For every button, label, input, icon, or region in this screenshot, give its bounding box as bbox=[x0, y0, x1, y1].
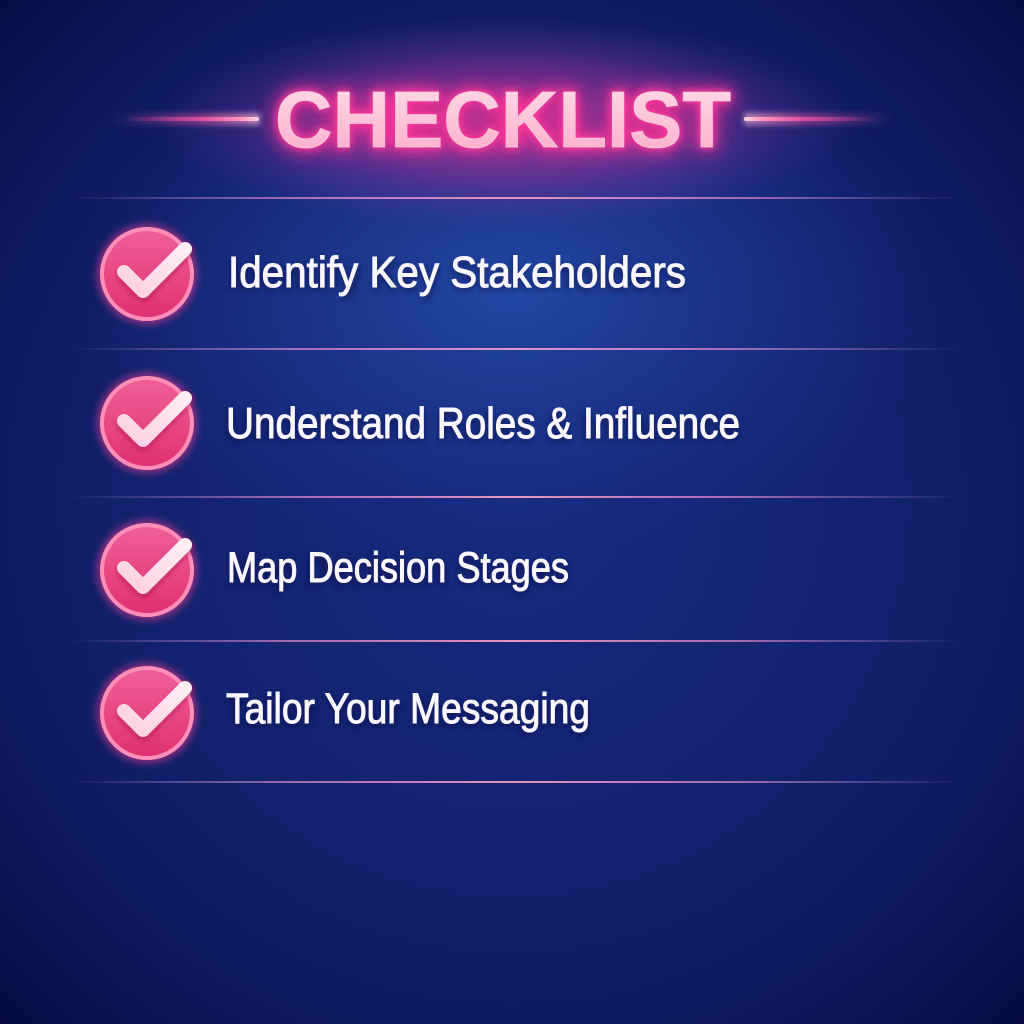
left title flare bbox=[110, 113, 260, 125]
divider 3 bbox=[70, 496, 960, 498]
divider 2 bbox=[70, 348, 960, 350]
label: item 4: Tailor Your Messaging bbox=[226, 685, 590, 733]
title: CHECKLIST bbox=[275, 75, 731, 164]
right title flare bbox=[744, 113, 894, 125]
divider 4 bbox=[70, 640, 960, 642]
divider 5 bbox=[70, 781, 960, 783]
label: item 2: Understand Roles & Influence bbox=[226, 399, 740, 448]
label: item 3: Map Decision Stages bbox=[227, 547, 569, 595]
label: item 1: Identify Key Stakeholders bbox=[228, 251, 686, 300]
divider 1 bbox=[70, 197, 960, 199]
label: item 2: Understand Roles & Influence bbox=[226, 402, 740, 451]
icon: check 1 bbox=[97, 224, 197, 324]
background highlight bbox=[0, 0, 1024, 620]
checklist item 2 bbox=[97, 373, 740, 473]
title glow bbox=[155, 17, 855, 227]
icon: check 2 bbox=[97, 373, 197, 473]
label: item 1: Identify Key Stakeholders bbox=[228, 248, 686, 297]
checklist item 1 bbox=[97, 224, 686, 324]
icon: check 4 bbox=[97, 663, 197, 763]
title: CHECKLIST bbox=[275, 75, 731, 164]
label: item 4: Tailor Your Messaging bbox=[226, 688, 590, 736]
label: item 3: Map Decision Stages bbox=[227, 544, 569, 592]
title: CHECKLIST bbox=[275, 75, 731, 164]
checklist item 3 bbox=[97, 520, 569, 620]
icon: check 3 bbox=[97, 520, 197, 620]
checklist item 4 bbox=[97, 663, 590, 763]
